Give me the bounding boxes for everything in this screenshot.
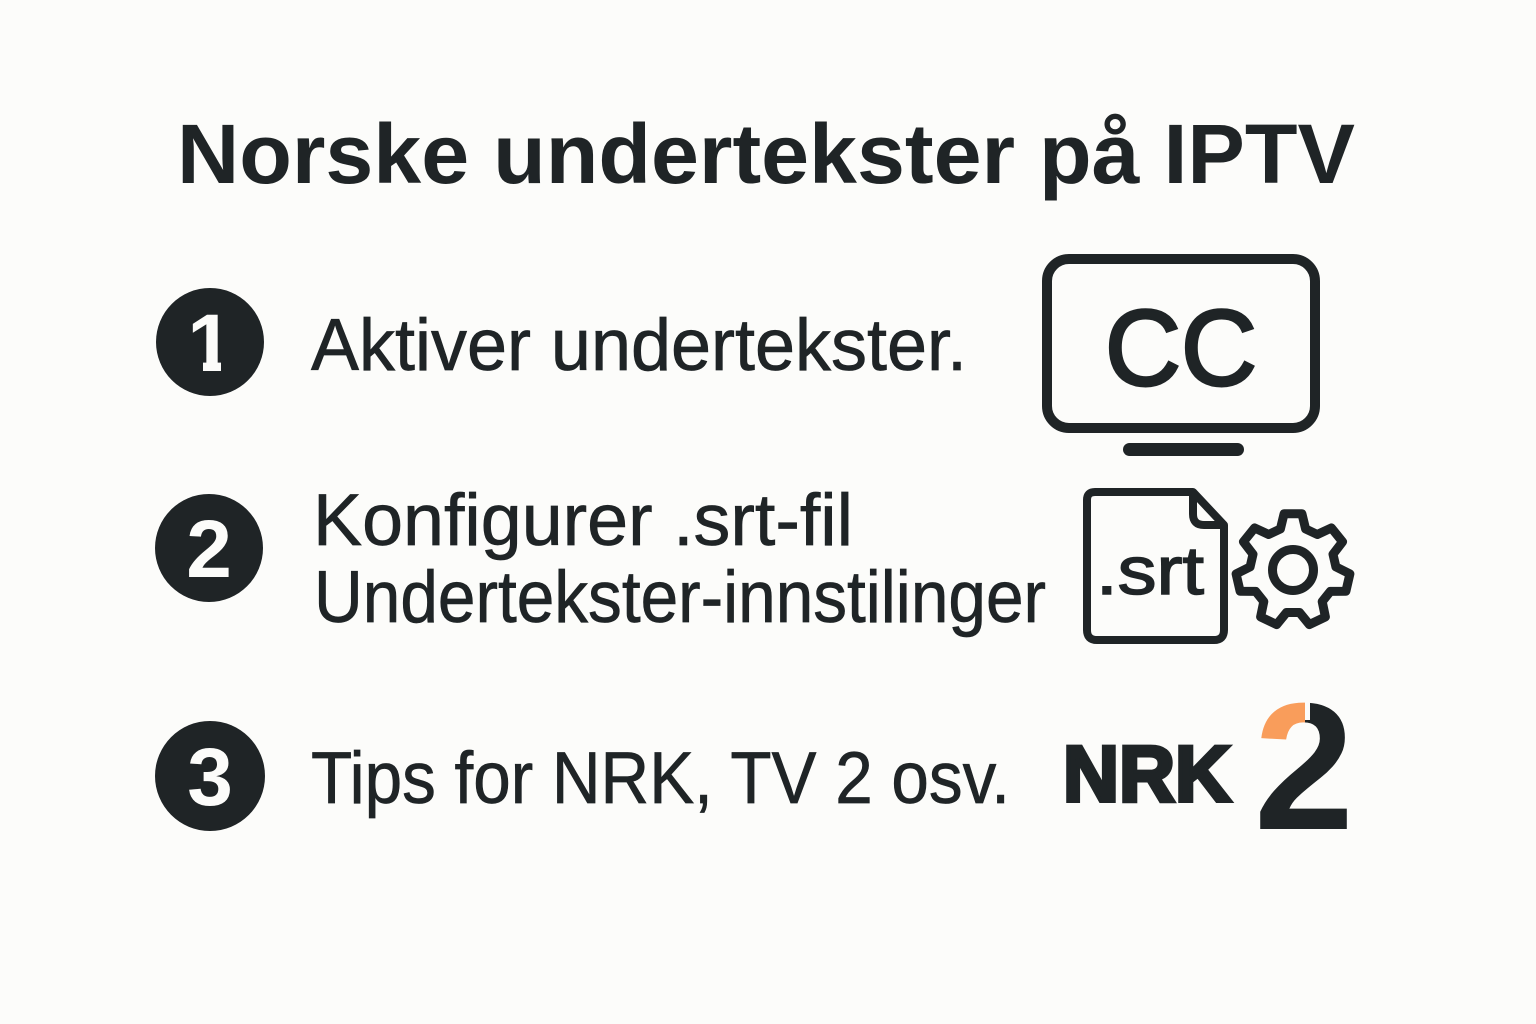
badge: number 3: 3 — [187, 732, 233, 823]
logo: TV 2: 2 — [1254, 666, 1354, 868]
step 1 text: Aktiver undertekster. — [311, 305, 967, 386]
icon: srt file — [1087, 492, 1224, 640]
icon: gear — [1236, 514, 1350, 625]
step 3 — [155, 702, 1347, 831]
logo: NRK: NRK — [1063, 729, 1231, 818]
title: Norske undertekster på IPTV — [177, 107, 1355, 201]
badge: number 2 — [155, 494, 263, 602]
step 1 — [156, 259, 1315, 456]
step 2 text — [313, 480, 1046, 638]
badge: number 3 — [155, 721, 265, 831]
badge: number 2: 2 — [186, 504, 232, 595]
step 2 text: Undertekster-innstilinger — [314, 557, 1046, 638]
badge: number 1 — [156, 288, 264, 396]
icon: srt file: .srt — [1096, 533, 1204, 609]
icon: TV with CC: CC — [1105, 287, 1257, 408]
logo: TV 2: 2 — [1254, 666, 1354, 868]
badge: number 1: 1 — [187, 298, 233, 389]
step 2 — [155, 480, 1350, 640]
icon: TV with CC — [1047, 259, 1315, 456]
step 3 text: Tips for NRK, TV 2 osv. — [311, 738, 1010, 819]
step 2 text: Konfigurer .srt-fil — [313, 480, 853, 561]
logo: TV 2 — [1260, 702, 1347, 829]
